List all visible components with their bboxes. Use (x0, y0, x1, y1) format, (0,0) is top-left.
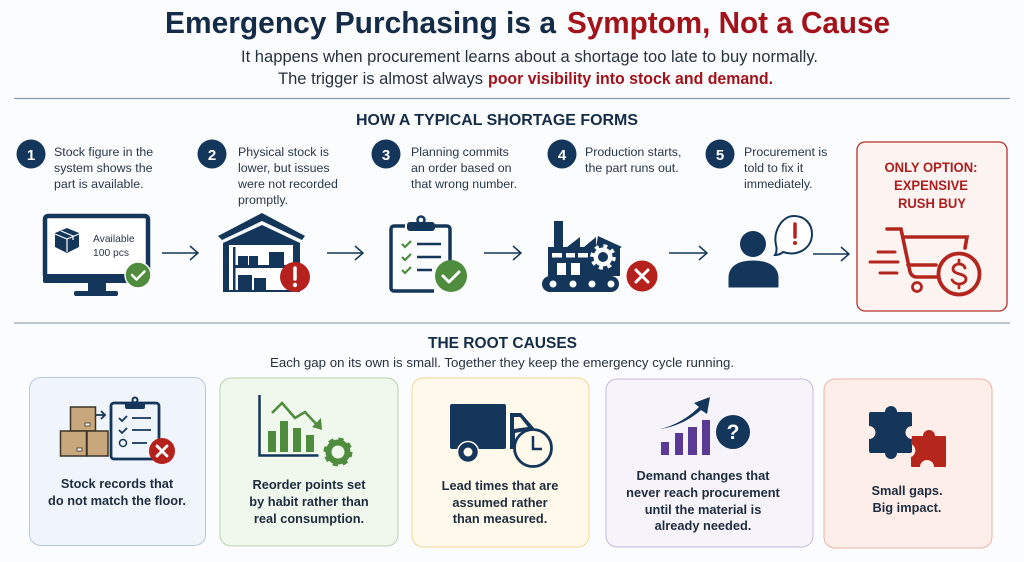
arrow 3 to 4 (484, 246, 521, 260)
step 5 (706, 140, 827, 287)
card text: until the material is (645, 502, 761, 517)
subtitle (241, 48, 818, 88)
step 2 text (237, 145, 338, 207)
card text (48, 476, 186, 508)
step 3 text: Planning commits (411, 145, 509, 159)
step 5 number: 5 (716, 147, 724, 164)
step 3 number: 3 (382, 147, 390, 164)
heading: how a typical shortage forms: HOW A TYPICAL SHORTAGE FORMS (356, 112, 638, 129)
arrow 4 to 5 (669, 246, 707, 260)
icon: trend chart and gear (260, 395, 350, 464)
step 4 text: Production starts, (585, 145, 681, 159)
step 4 (542, 140, 681, 292)
subtitle: The trigger is almost always (278, 70, 483, 88)
card text: Big impact. (873, 500, 941, 515)
icon: rising bars with question: ? (727, 421, 739, 444)
subtitle: It happens when procurement learns about a shortage too late to buy normally. (241, 48, 818, 66)
step 1 text (54, 145, 153, 191)
card text: Demand changes that (637, 468, 770, 483)
step 3 (372, 140, 517, 292)
step 5 text: told to fix it (744, 161, 804, 175)
subtitle: poor visibility into stock and demand. (488, 70, 773, 88)
card text: real consumption. (254, 511, 364, 526)
card text: Reorder points set (252, 477, 366, 492)
step 1 number: 1 (27, 147, 35, 164)
step 4 text (585, 145, 681, 175)
icon: boxes and clipboard with error (60, 398, 175, 464)
panel: stock records (30, 378, 206, 546)
card text: assumed rather (452, 495, 548, 510)
card text (442, 478, 558, 526)
step 2 text: lower, but issues (238, 161, 330, 175)
step 1 text: system shows the (54, 161, 153, 175)
step 4 text: the part runs out. (585, 161, 679, 175)
step 2 text: were not recorded (237, 177, 338, 191)
card text: already needed. (655, 518, 751, 533)
card text: than measured. (453, 511, 547, 526)
icon: factory on conveyor (542, 221, 658, 292)
step 2 text: Physical stock is (238, 145, 329, 159)
step 5 text: Procurement is (744, 145, 827, 159)
step 5 text (744, 145, 827, 191)
icon: person with alert speech bubble (729, 216, 812, 287)
step 2 (198, 140, 338, 292)
step 1 text: part is available. (54, 177, 144, 191)
step 2 number (198, 140, 226, 168)
rush buy heading: EXPENSIVE (894, 178, 968, 193)
icon: monitor with available stock: 100 pcs (93, 248, 129, 259)
card text (626, 468, 781, 533)
root causes subtitle: Each gap on its own is small. Together they keep the emergency cycle running. (270, 355, 734, 370)
step 3 text: that wrong number. (411, 177, 517, 191)
step 2 number: 2 (208, 147, 216, 164)
step 4 number: 4 (558, 147, 567, 164)
rush buy heading (884, 160, 978, 211)
icon: clipboard with check (391, 216, 467, 292)
step 2 text: promptly. (238, 193, 288, 207)
step 4 number (548, 140, 576, 168)
arrow 1 to 2 (162, 246, 198, 260)
step 1 (16, 140, 153, 296)
step 1 text: Stock figure in the (54, 145, 153, 159)
title (165, 5, 890, 40)
step 5 number (706, 140, 734, 168)
panel: reorder points (220, 378, 398, 546)
panel: only option expensive rush buy (857, 142, 1007, 311)
icon: puzzle pieces (869, 406, 946, 467)
step 3 text (411, 145, 517, 191)
arrow 5 to rush buy (813, 247, 849, 261)
card text (871, 483, 943, 515)
icon: rising bars with question (660, 397, 750, 455)
title: Emergency Purchasing is a (165, 5, 557, 40)
icon: speeding cart with dollar (870, 229, 980, 294)
icon: monitor with available stock (43, 216, 151, 296)
step 1 number (16, 140, 46, 168)
panel: demand changes (606, 379, 813, 547)
title: Symptom, Not a Cause (567, 5, 890, 40)
heading: the root causes: THE ROOT CAUSES (428, 335, 577, 352)
step 3 text: an order based on (411, 161, 512, 175)
step 5 text: immediately. (744, 177, 813, 191)
panel: lead times (412, 378, 589, 547)
step 3 number (372, 140, 400, 168)
icon: monitor with available stock: Available (93, 234, 135, 245)
icon: warehouse with alert (218, 213, 310, 292)
panel: small gaps big impact (824, 379, 992, 548)
card text: by habit rather than (249, 494, 369, 509)
card text (249, 477, 369, 526)
arrow 2 to 3 (327, 246, 363, 260)
card text: Lead times that are (442, 478, 558, 493)
rush buy heading: RUSH BUY (898, 196, 966, 211)
icon: truck with clock (450, 404, 552, 466)
card text: never reach procurement (626, 485, 781, 500)
card text: Stock records that (61, 476, 174, 491)
rush buy heading: ONLY OPTION: (884, 160, 978, 175)
card text: Small gaps. (871, 483, 943, 498)
card text: do not match the floor. (48, 493, 186, 508)
